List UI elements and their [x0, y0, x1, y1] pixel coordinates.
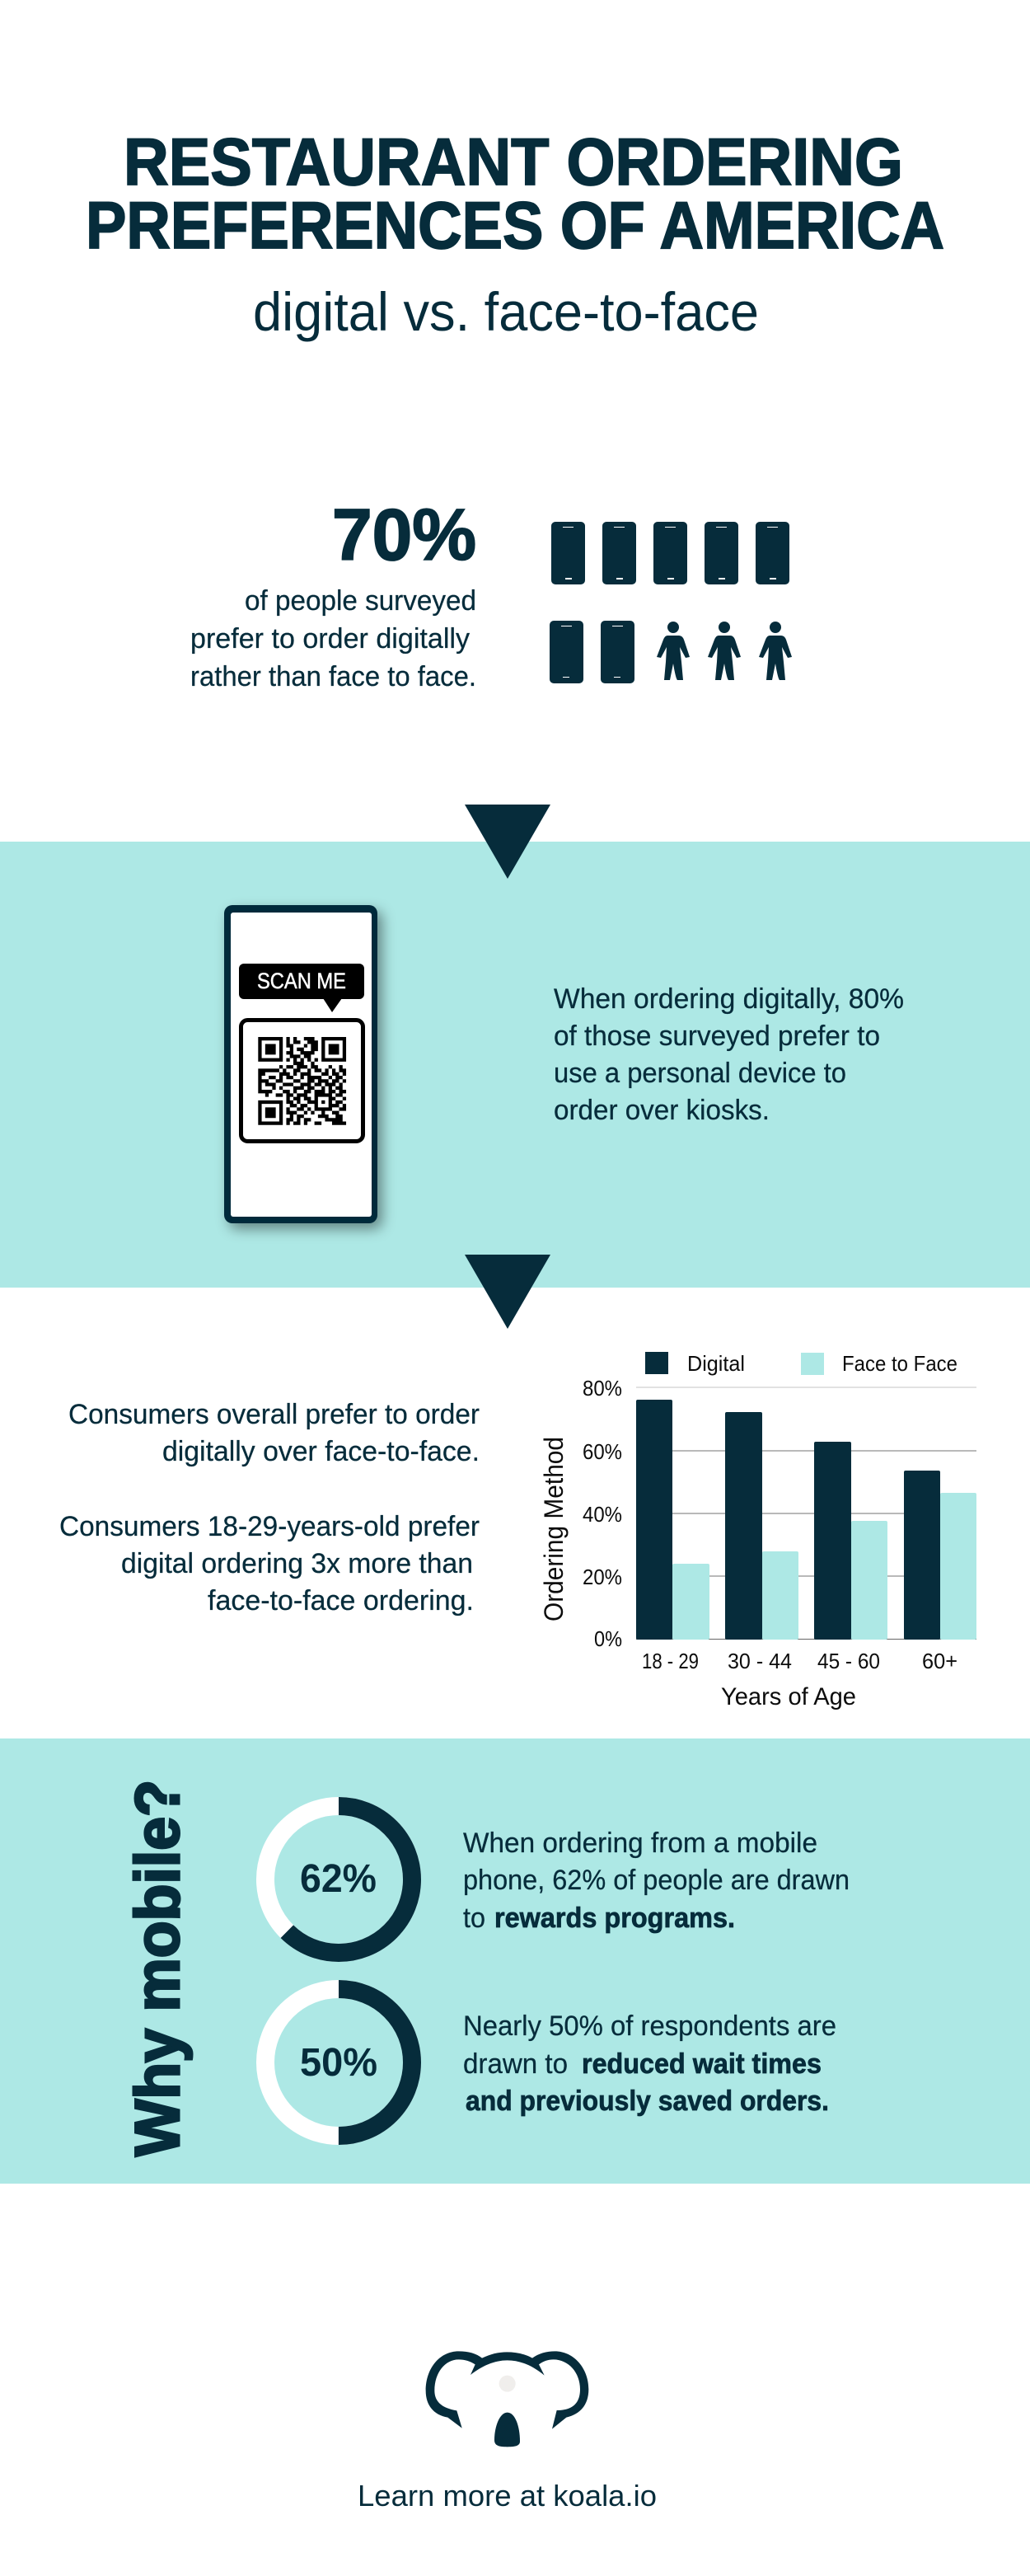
text: consumers prefer digital: Consumers 18-29-years-old prefer	[59, 1511, 480, 1542]
y axis labels	[583, 1376, 622, 1651]
panel: why mobile	[0, 1738, 1030, 2184]
legend	[645, 1351, 957, 1376]
heading: why mobile: Why mobile?	[123, 1780, 193, 2156]
face to face bars	[672, 1493, 976, 1640]
text: consumers prefer digital: digital ordering 3x more than	[121, 1548, 473, 1579]
reduced wait times text: drawn to	[463, 2048, 568, 2080]
reduced wait times text: and previously saved orders.	[466, 2086, 829, 2117]
QR code frame	[241, 1021, 363, 1141]
y axis labels: 40%	[583, 1502, 622, 1527]
y axis labels: 60%	[583, 1439, 622, 1464]
legend: Digital	[687, 1351, 745, 1376]
donut chart: 62%	[265, 1806, 412, 1953]
legend: Face to Face	[842, 1351, 957, 1376]
stat description: prefer to order digitally	[190, 623, 470, 655]
arrow: down triangle 1	[465, 805, 550, 879]
arrow: down triangle 2	[465, 1255, 550, 1329]
text: consumers prefer digital: Consumers overall prefer to order	[68, 1399, 480, 1430]
y axis title: Ordering Method	[539, 1437, 569, 1621]
reduced wait times text	[463, 2011, 836, 2117]
scan me speech bubble: SCAN ME	[257, 969, 346, 993]
icon: koala logo	[426, 2351, 588, 2447]
rewards programs text: rewards programs.	[494, 1903, 735, 1934]
device preference text: use a personal device to	[554, 1058, 846, 1089]
y axis labels: 80%	[583, 1376, 622, 1401]
big number: 70%: 70%	[332, 494, 476, 575]
device preference text: When ordering digitally, 80%	[554, 983, 904, 1015]
device preference text	[554, 983, 904, 1126]
phone mockup with QR code	[224, 905, 377, 1223]
reduced wait times text: reduced wait times	[582, 2048, 822, 2080]
bar chart: ordering method by age	[539, 1351, 976, 1710]
rewards programs text: to	[463, 1903, 485, 1934]
text: consumers prefer digital: digitally over face-to-face.	[162, 1436, 480, 1467]
panel: 70 percent stat	[190, 494, 792, 692]
stat description: of people surveyed	[245, 585, 476, 617]
footer: learn more: Learn more at koala.io	[358, 2479, 657, 2513]
x axis labels: 60+	[922, 1649, 957, 1673]
reduced wait times text: Nearly 50% of respondents are	[463, 2011, 836, 2042]
title: RESTAURANT ORDERING	[124, 125, 903, 199]
donut chart: 62%: 62%	[300, 1857, 377, 1901]
title	[86, 125, 944, 263]
device preference text: order over kiosks.	[554, 1095, 770, 1126]
x axis labels	[642, 1649, 957, 1673]
text: consumers prefer digital	[59, 1399, 480, 1616]
donut chart: 50%: 50%	[300, 2041, 377, 2085]
text: consumers prefer digital: face-to-face ordering.	[208, 1585, 474, 1616]
stat description	[190, 585, 476, 692]
rewards programs text: phone, 62% of people are drawn	[463, 1865, 850, 1896]
QR code	[258, 1039, 346, 1124]
x axis labels: 30 - 44	[728, 1649, 792, 1673]
y axis labels: 0%	[594, 1626, 622, 1651]
subtitle: digital vs. face-to-face	[253, 281, 759, 342]
rewards programs text	[463, 1828, 850, 1934]
digital bars	[636, 1400, 940, 1640]
title: PREFERENCES OF AMERICA	[86, 189, 944, 263]
y axis labels: 20%	[583, 1565, 622, 1589]
panel: personal device preference	[0, 842, 1030, 1288]
x axis labels: 18 - 29	[642, 1649, 699, 1673]
icon grid: 7 phones and 3 people	[550, 522, 792, 683]
rewards programs text: When ordering from a mobile	[463, 1828, 817, 1859]
device preference text: of those surveyed prefer to	[554, 1021, 880, 1052]
x axis labels: 45 - 60	[817, 1649, 880, 1673]
stat description: rather than face to face.	[190, 661, 476, 692]
donut chart: 50%	[265, 1989, 412, 2136]
x axis title: Years of Age	[721, 1683, 856, 1710]
scan me speech bubble	[239, 964, 364, 1012]
